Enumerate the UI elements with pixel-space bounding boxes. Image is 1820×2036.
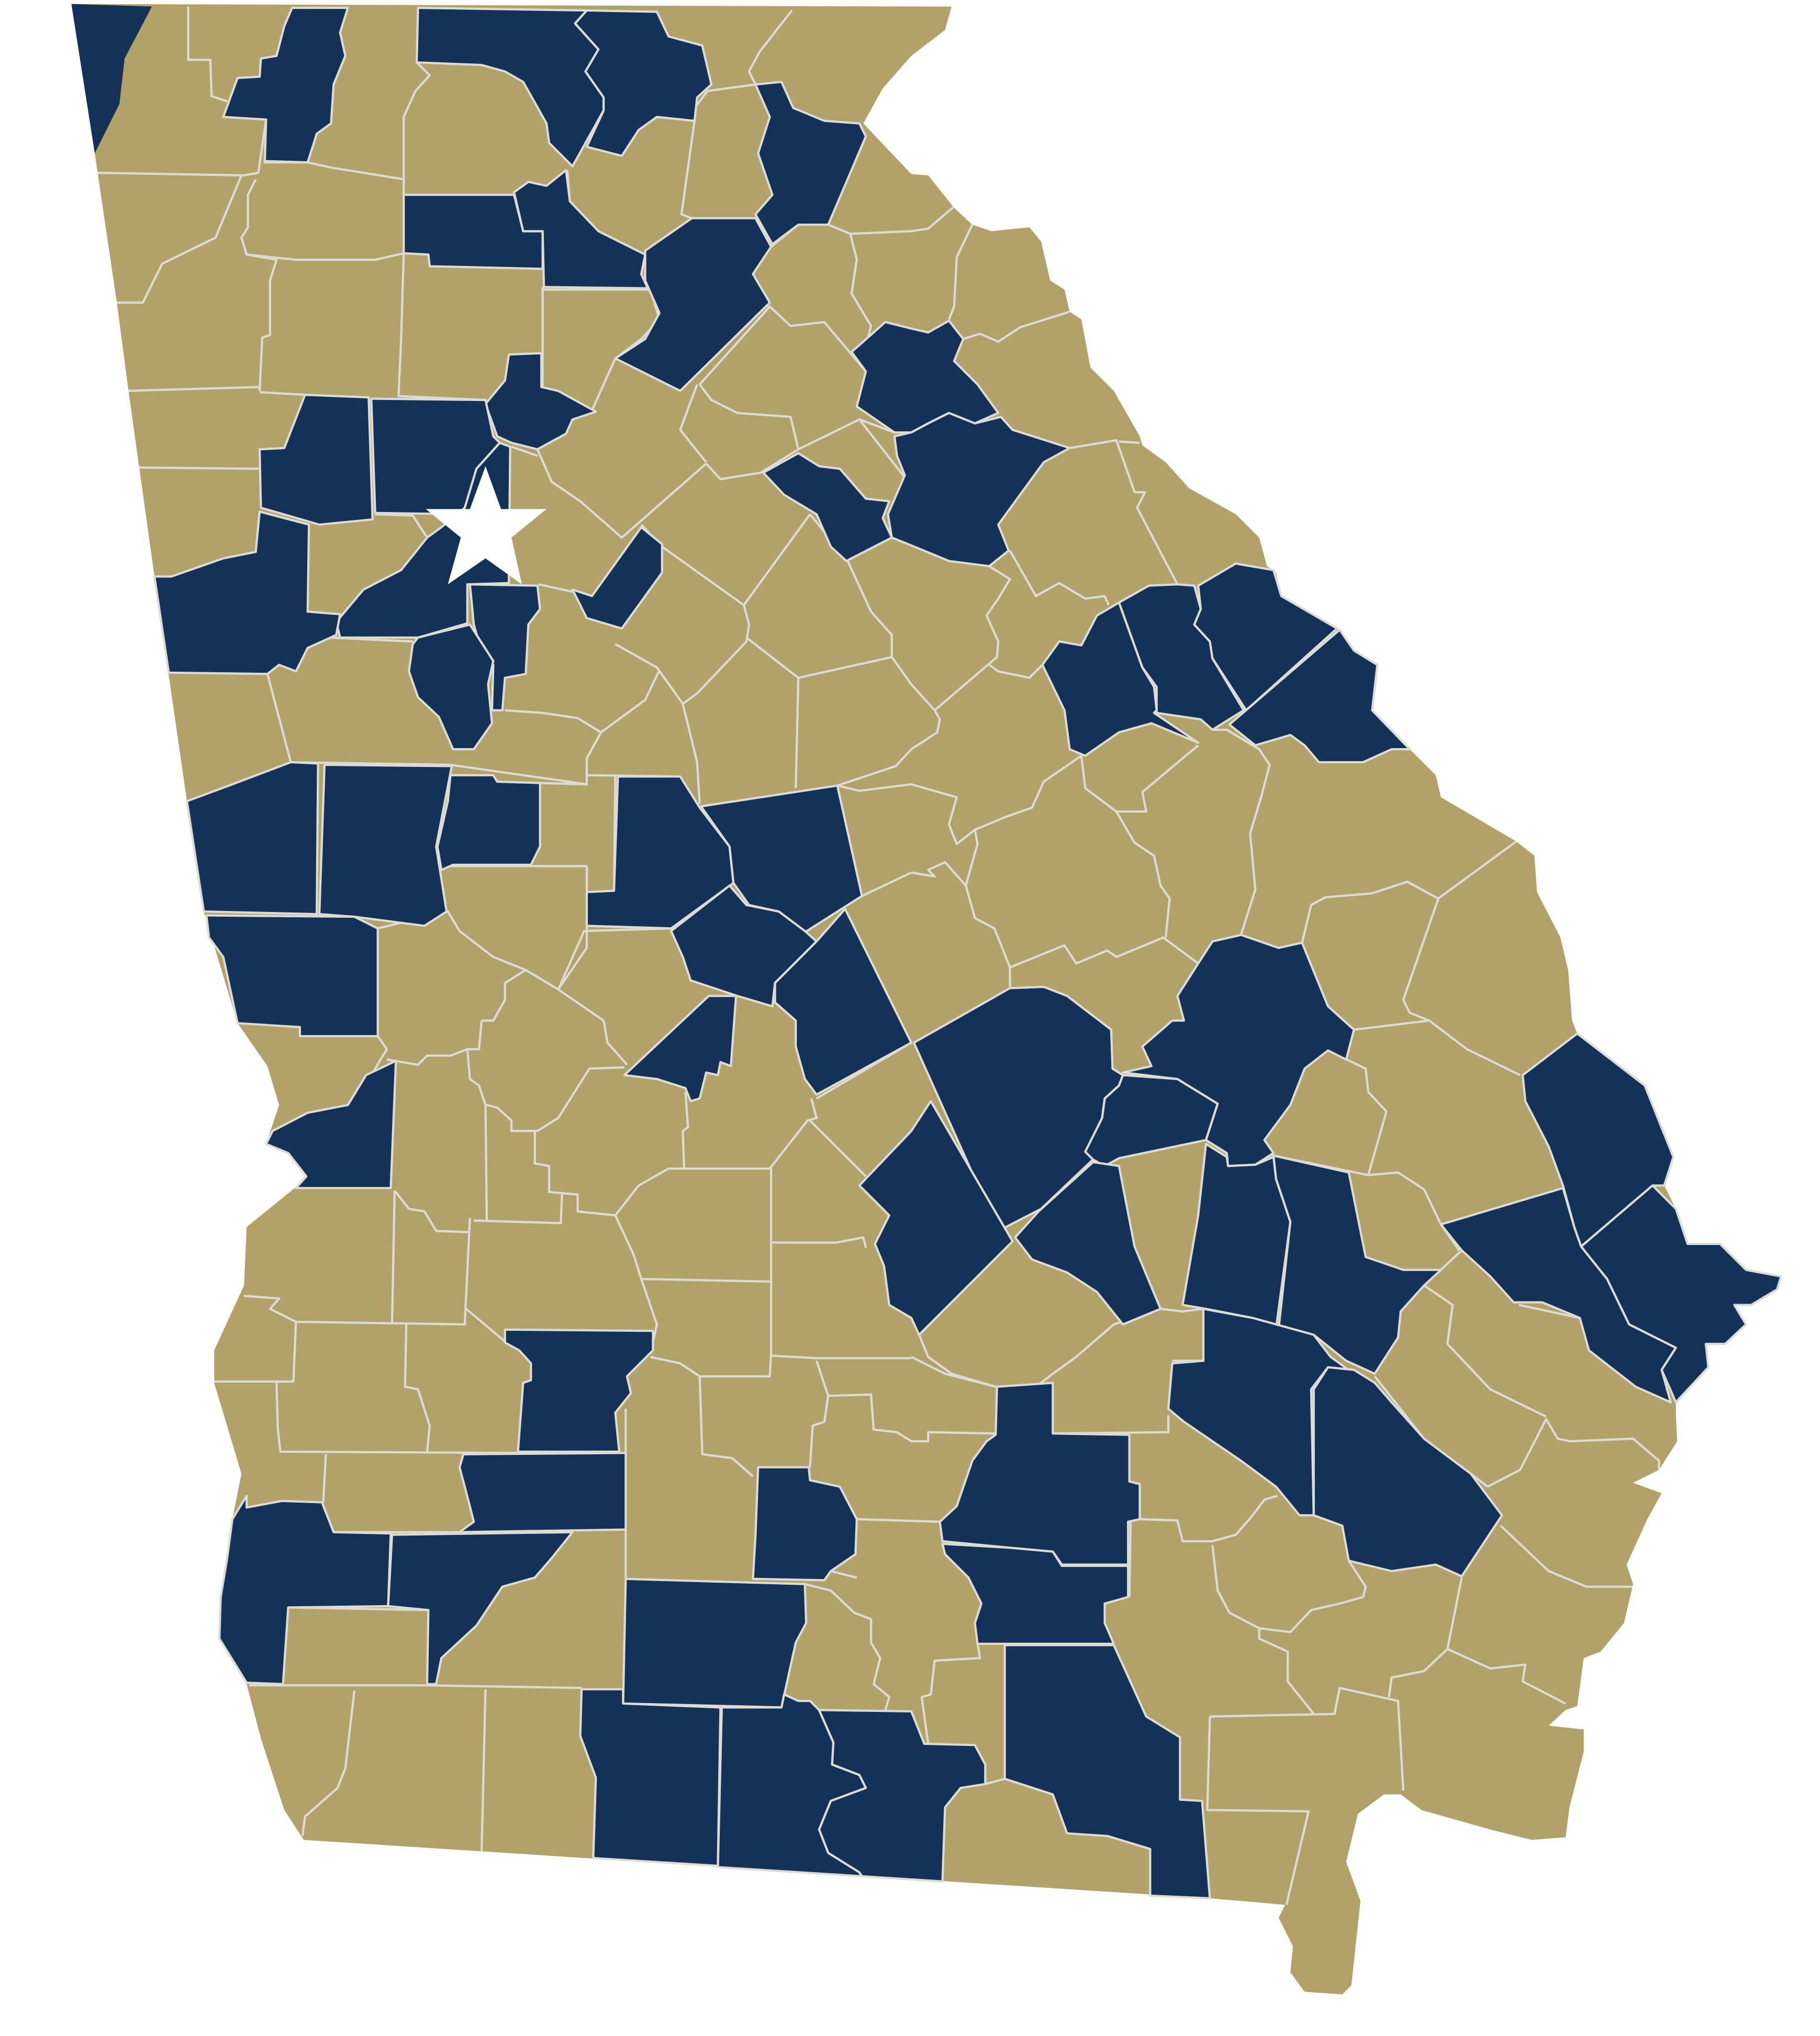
white star marker — [426, 466, 546, 584]
